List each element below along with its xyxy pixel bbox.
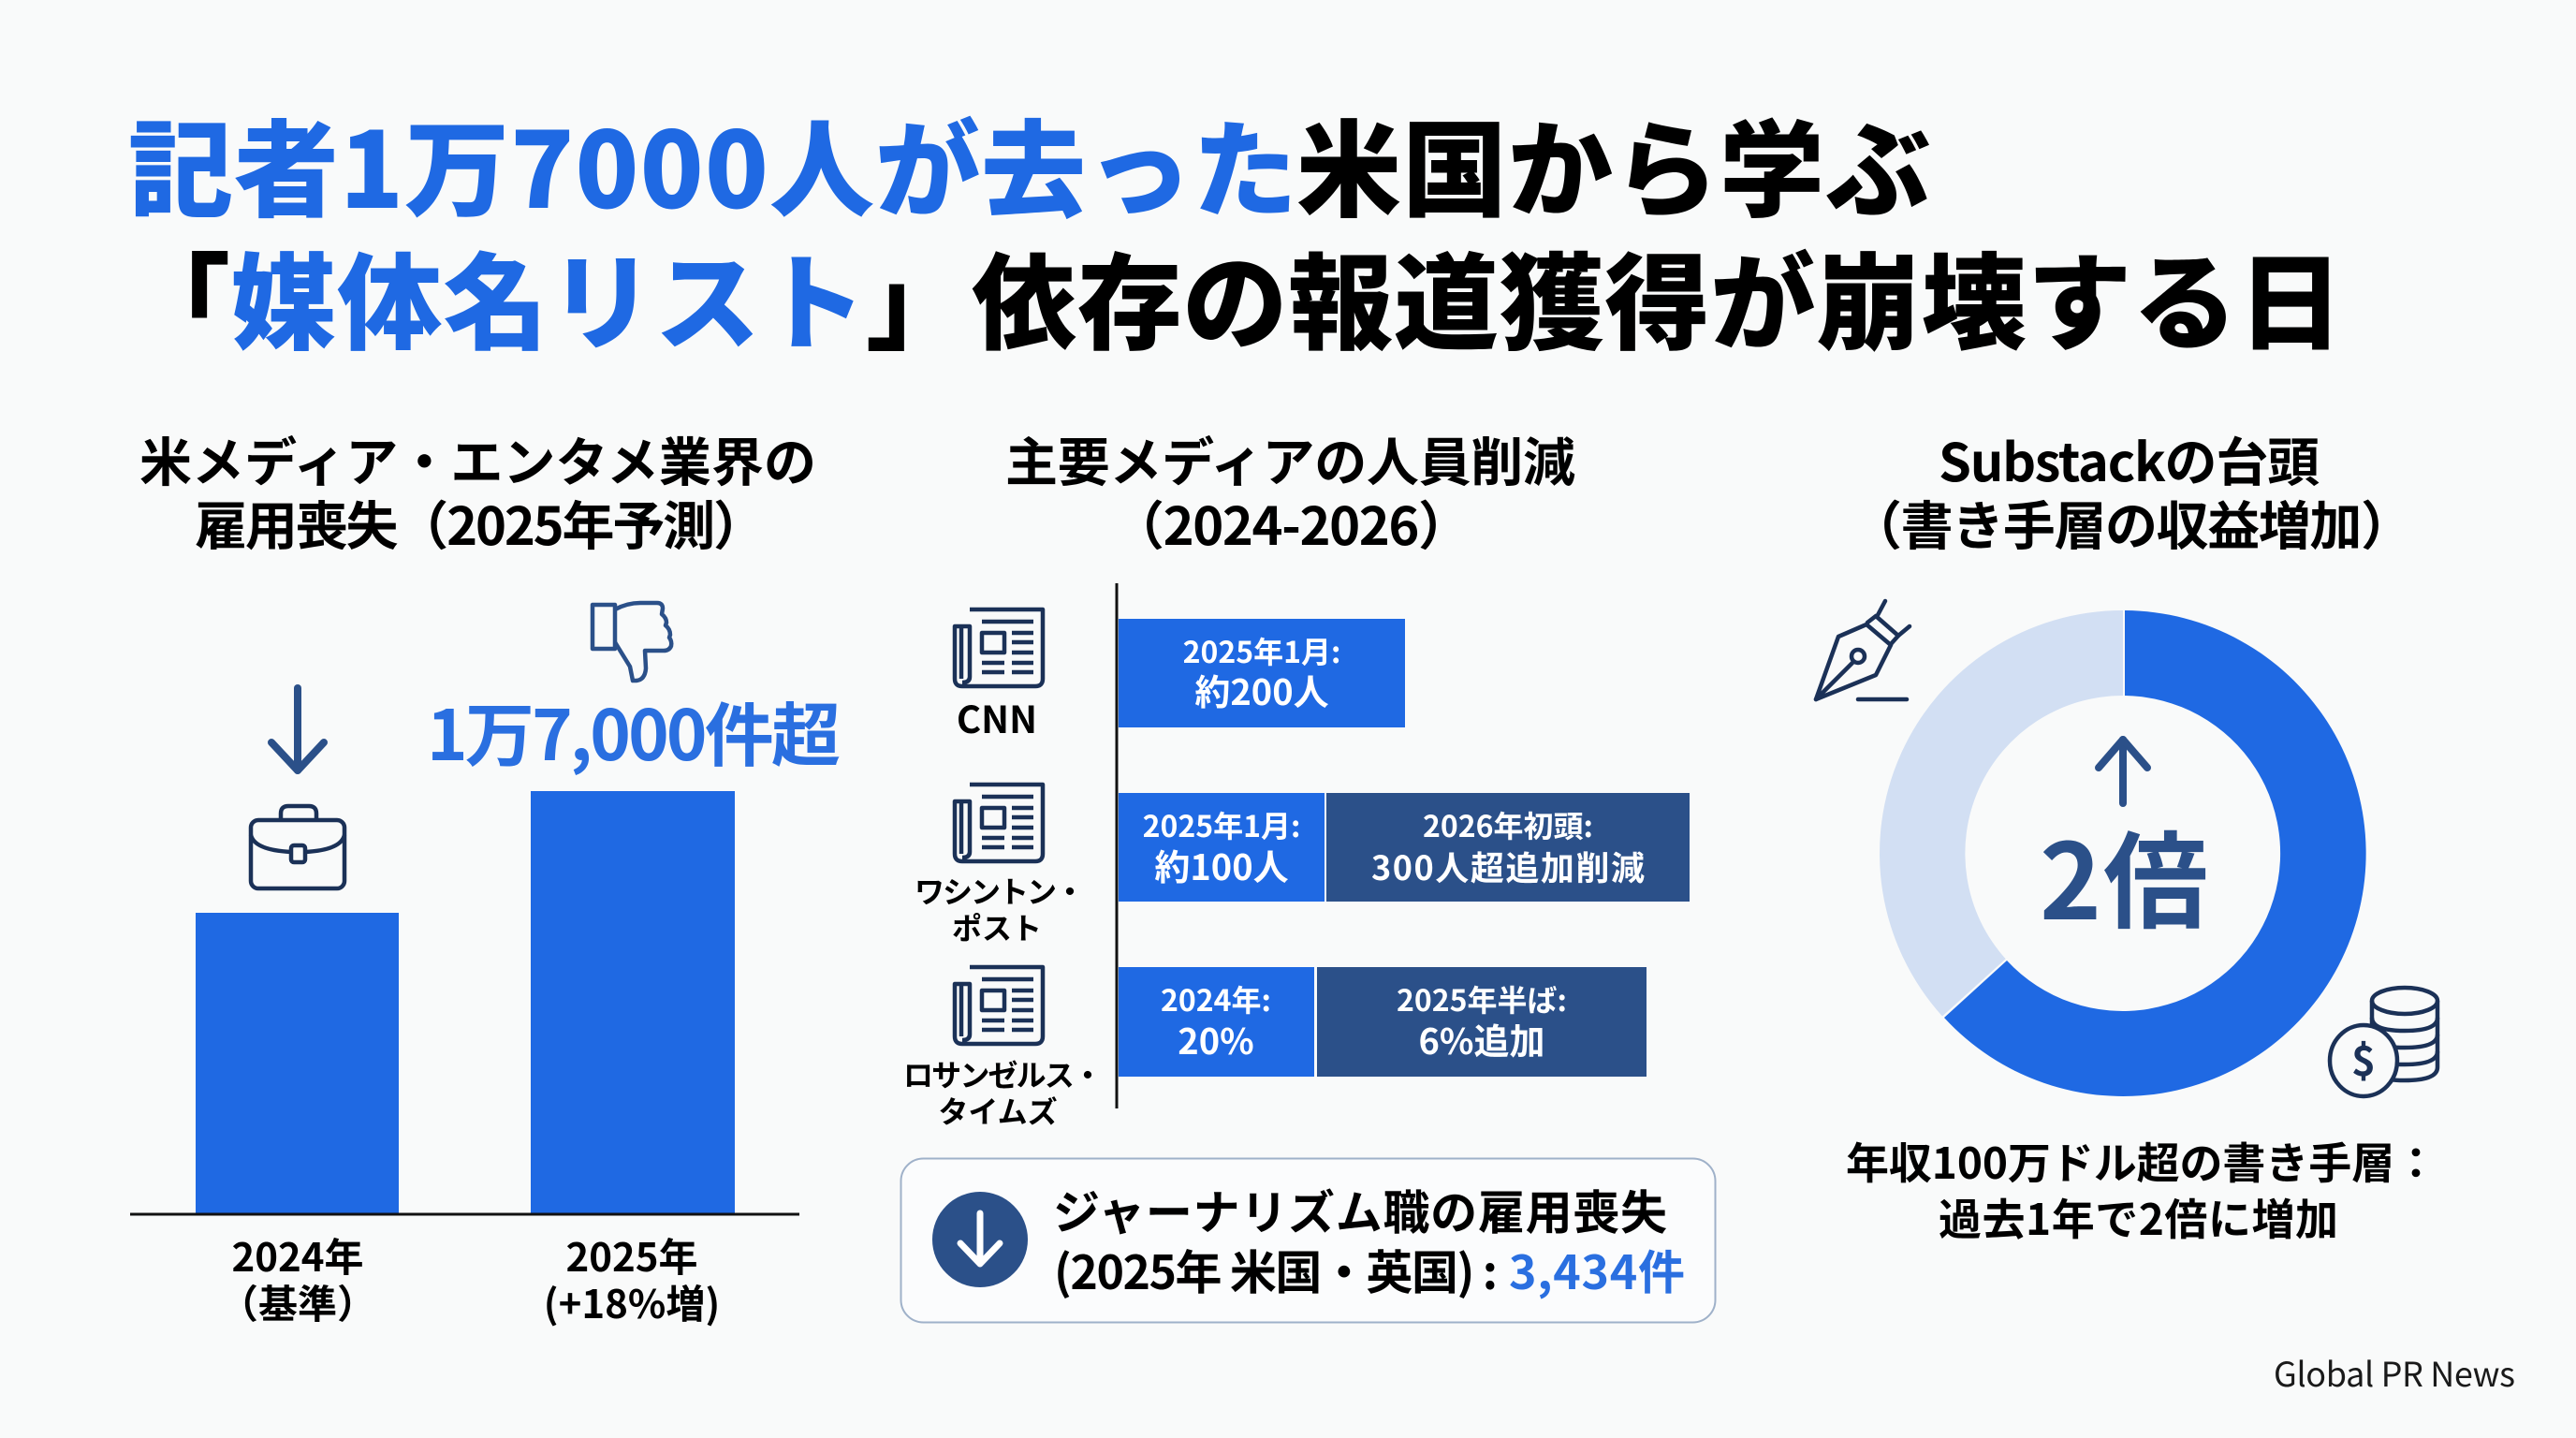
label: 2025: (+18%増) bbox=[544, 1273, 720, 1330]
callout text bbox=[1053, 1176, 1685, 1303]
icon: newspaper LA Times bbox=[955, 967, 1043, 1044]
icon: newspaper Washington Post bbox=[955, 785, 1043, 861]
panel: bar chart employment loss bbox=[130, 603, 841, 1330]
icon: up arrow bbox=[2099, 740, 2147, 803]
label: LA Times: ロサンゼルス・ bbox=[903, 1052, 1103, 1095]
title: 依存の報道獲得が崩壊する日 bbox=[972, 220, 2343, 372]
caption: Substack writers: 年収100万ドル超の書き手層： bbox=[1846, 1130, 2437, 1192]
heading: Substack bbox=[1850, 421, 2413, 561]
title: 「 bbox=[125, 220, 230, 372]
caption: Substack writers bbox=[1846, 1130, 2437, 1248]
row: CNN bar bbox=[1119, 619, 1405, 727]
panel: donut chart bbox=[1816, 601, 2437, 1096]
value label: 1万7,000件超 bbox=[427, 681, 841, 781]
label: 2025: 2025年 bbox=[565, 1226, 698, 1284]
value: 2x: 2倍 bbox=[2040, 799, 2208, 950]
icon: briefcase bbox=[251, 806, 344, 888]
heading: employment loss: 雇用喪失（2025年予測） bbox=[195, 485, 766, 561]
panel: media layoffs chart bbox=[903, 583, 1690, 1132]
row: LA Times bars: 20% bbox=[1178, 1013, 1254, 1064]
label: CNN: CNN bbox=[957, 690, 1037, 744]
label: 2024: （基準） bbox=[219, 1273, 376, 1330]
label: Washington Post: ポスト bbox=[952, 905, 1042, 948]
caption: Substack writers: 過去1年で2倍に増加 bbox=[1939, 1186, 2338, 1248]
row: LA Times bars bbox=[1119, 967, 1647, 1077]
icon: thumbs down bbox=[593, 603, 671, 681]
source credit: Global PR News bbox=[2274, 1348, 2515, 1397]
label: Washington Post: ワシントン・ bbox=[915, 869, 1085, 912]
title: 記者1万7000人が去った bbox=[128, 87, 1297, 239]
icon: newspaper CNN bbox=[955, 609, 1043, 686]
heading: major media layoffs: 主要メディアの人員削減 bbox=[1005, 421, 1575, 497]
callout: journalism job losses bbox=[900, 1159, 1715, 1322]
callout text: (2025年 米国・英国) : bbox=[1054, 1236, 1498, 1303]
row: Washington Post bars bbox=[1119, 793, 1690, 902]
label: LA Times: タイムズ bbox=[938, 1089, 1058, 1132]
row: Washington Post bars: 300人超追加削減 bbox=[1371, 842, 1645, 890]
donut segment: blue bbox=[1944, 610, 2366, 1096]
callout text: ジャーナリズム職の雇用喪失 bbox=[1053, 1176, 1667, 1243]
row: Washington Post bars: 約100人 bbox=[1154, 839, 1289, 890]
icon: coins: $ bbox=[2351, 1028, 2376, 1088]
icon: fountain pen bbox=[1816, 601, 1910, 699]
icon: down arrow bbox=[271, 688, 324, 770]
bar: 2024 bbox=[196, 913, 399, 1214]
label: 2024 bbox=[219, 1226, 376, 1330]
heading: employment loss: 米メディア・エンタメ業界の bbox=[139, 421, 816, 497]
chart axis bbox=[1116, 583, 1118, 1108]
row: CNN bar: 2025年1月: bbox=[1183, 629, 1340, 672]
donut segment: light bbox=[1880, 610, 2123, 1017]
heading: major media layoffs bbox=[1005, 421, 1575, 561]
heading: major media layoffs: （2024-2026） bbox=[1112, 485, 1471, 561]
label: 2025 bbox=[544, 1226, 720, 1330]
label: 2024: 2024年 bbox=[231, 1226, 364, 1284]
icon: down arrow circle bbox=[932, 1192, 1028, 1287]
row: LA Times bars: 2025年半ば: bbox=[1397, 977, 1567, 1020]
title bbox=[125, 87, 2343, 372]
heading: Substack: Substackの台頭 bbox=[1939, 421, 2320, 497]
callout text: 3,434件 bbox=[1509, 1236, 1685, 1303]
bar: 2025 bbox=[531, 791, 735, 1214]
label: Washington Post bbox=[915, 869, 1085, 948]
heading: employment loss bbox=[139, 421, 816, 561]
label: LA Times bbox=[903, 1052, 1103, 1132]
row: CNN bar: 約200人 bbox=[1194, 664, 1329, 715]
icon: coins bbox=[2330, 988, 2437, 1096]
title: 米国から学ぶ bbox=[1296, 87, 1930, 239]
row: LA Times bars: 2024年: bbox=[1161, 977, 1271, 1020]
row: LA Times bars: 6%追加 bbox=[1418, 1013, 1545, 1064]
chart axis bbox=[130, 1213, 799, 1215]
row: Washington Post bars: 2025年1月: bbox=[1143, 803, 1300, 846]
title: 」 bbox=[866, 220, 971, 372]
row: Washington Post bars: 2026年初頭: bbox=[1423, 803, 1593, 846]
title: 媒体名リスト bbox=[231, 220, 866, 372]
heading: Substack: （書き手層の収益増加） bbox=[1850, 485, 2413, 561]
